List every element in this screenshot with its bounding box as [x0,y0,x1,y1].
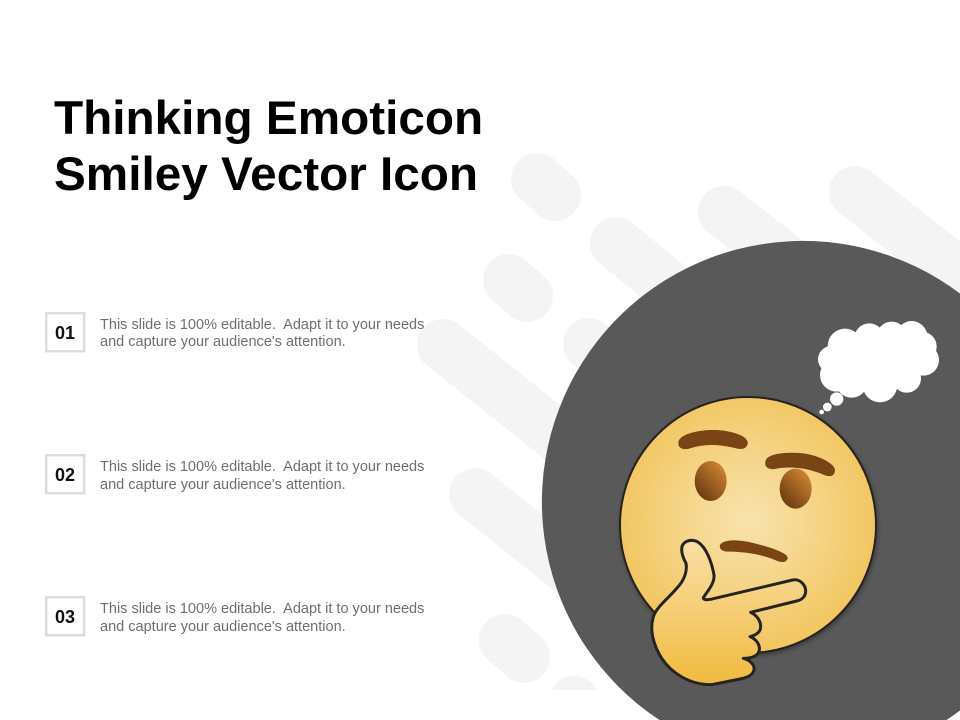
thinking emoji [620,321,939,685]
face [620,397,876,653]
number box 03: 03 [55,607,75,627]
thought bubble [818,321,939,414]
description 02: and capture your audience's attention. [100,477,346,493]
description 01: and capture your audience's attention. [100,334,346,350]
description 01: This slide is 100% editable. Adapt it to your needs [100,317,424,333]
eyes [695,461,812,509]
dark circle [542,241,960,720]
facial features [678,430,835,562]
eyebrows [678,430,835,476]
title: Thinking Emoticon [54,92,483,145]
number box 03 [46,597,84,635]
title: Smiley Vector Icon [54,148,478,201]
number box 02: 02 [55,465,75,485]
number box 01 [46,313,84,351]
mouth [720,540,788,562]
description 03: and capture your audience's attention. [100,619,346,635]
number box 01: 01 [55,323,75,343]
number box 02 [46,455,84,493]
item 01 [46,313,424,351]
hand [652,540,806,685]
item 02 [46,455,424,493]
description 03: This slide is 100% editable. Adapt it to your needs [100,601,424,617]
description 02: This slide is 100% editable. Adapt it to your needs [100,459,424,475]
item 03 [46,597,424,635]
background pills [443,166,960,690]
